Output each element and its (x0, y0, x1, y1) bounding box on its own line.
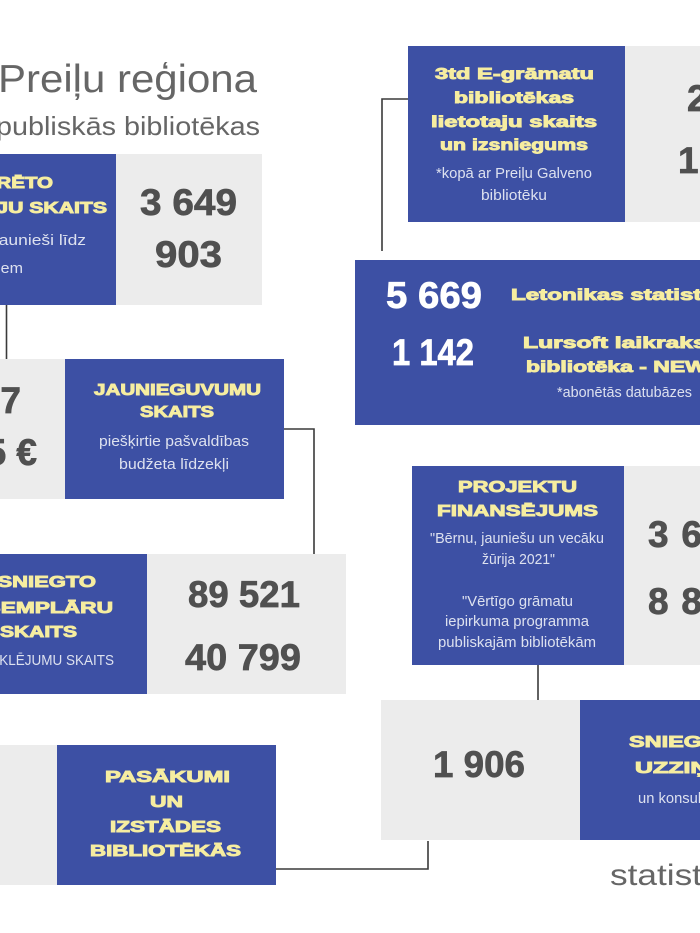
title: Preiļu reģiona (0, 58, 257, 101)
panel: e-book library: 3td E-grāmatu (435, 66, 594, 83)
panel: events and exhibitions: BIBLIOTĒKĀS (90, 843, 241, 860)
panel: project funding (412, 466, 700, 665)
panel: subscribed databases: 1 142 (392, 332, 474, 373)
panel: e-book library: bibliotēku (481, 187, 547, 204)
panel: project funding: "Vērtīgo grāmatu (462, 593, 573, 610)
panel: new acquisitions: piešķirtie pašvaldības (99, 433, 249, 450)
panel: events and exhibitions: PASĀKUMI (105, 769, 230, 786)
panel: project funding: žūrija 2021" (482, 551, 555, 568)
panel: project funding: iepirkuma programma (445, 613, 590, 630)
panel: subscribed databases: Lursoft laikrakstu (523, 335, 700, 352)
panel: e-book library (408, 46, 700, 222)
panel: items lent: 89 521 (188, 574, 300, 615)
panel: events and exhibitions: IZSTĀDES (110, 819, 221, 836)
panel: items lent: SKAITS (0, 624, 77, 641)
panel: events and exhibitions (0, 745, 276, 885)
panel: registered users: 903 (155, 234, 222, 275)
panel: project funding: FINANSĒJUMS (437, 503, 598, 520)
title (0, 58, 260, 141)
panel: new acquisitions: 7 (0, 380, 21, 421)
panel: new acquisitions: budžeta līdzekļi (119, 456, 229, 473)
panel: subscribed databases (355, 260, 700, 425)
panel: subscribed databases: *abonētās datubāzes (557, 384, 692, 401)
panel: information enquiries: 1 906 (433, 744, 525, 785)
panel: events and exhibitions: UN (150, 794, 183, 811)
panel: items lent: 40 799 (185, 637, 301, 678)
title: publiskās bibliotēkas (0, 111, 260, 141)
panel: e-book library: 1 (678, 140, 699, 181)
panel: e-book library: lietotaju skaits (431, 114, 597, 131)
panel: e-book library: *kopā ar Preiļu Galveno (436, 165, 592, 182)
connector lines (6, 99, 538, 869)
panel: information enquiries (381, 700, 700, 840)
panel: items lent (0, 554, 346, 694)
panel: project funding: "Bērnu, jauniešu un vecāku (430, 530, 604, 547)
panel: e-book library: bibliotēkas (454, 90, 574, 107)
panel: new acquisitions: SKAITS (140, 404, 214, 421)
panel: subscribed databases: bibliotēka - NEWS (526, 359, 700, 376)
panel: project funding: publiskajām bibliotēkām (438, 634, 596, 651)
panel: new acquisitions: JAUNIEGUVUMU (94, 382, 261, 399)
panel: e-book library: un izsniegums (440, 137, 588, 154)
panel: subscribed databases: 5 669 (386, 275, 482, 316)
panel: registered users: 3 649 (140, 182, 237, 223)
panel: subscribed databases: Letonikas statistika (511, 287, 700, 304)
panel: new acquisitions (0, 359, 284, 499)
panel: registered users (0, 154, 262, 305)
panel: project funding: PROJEKTU (458, 479, 577, 496)
